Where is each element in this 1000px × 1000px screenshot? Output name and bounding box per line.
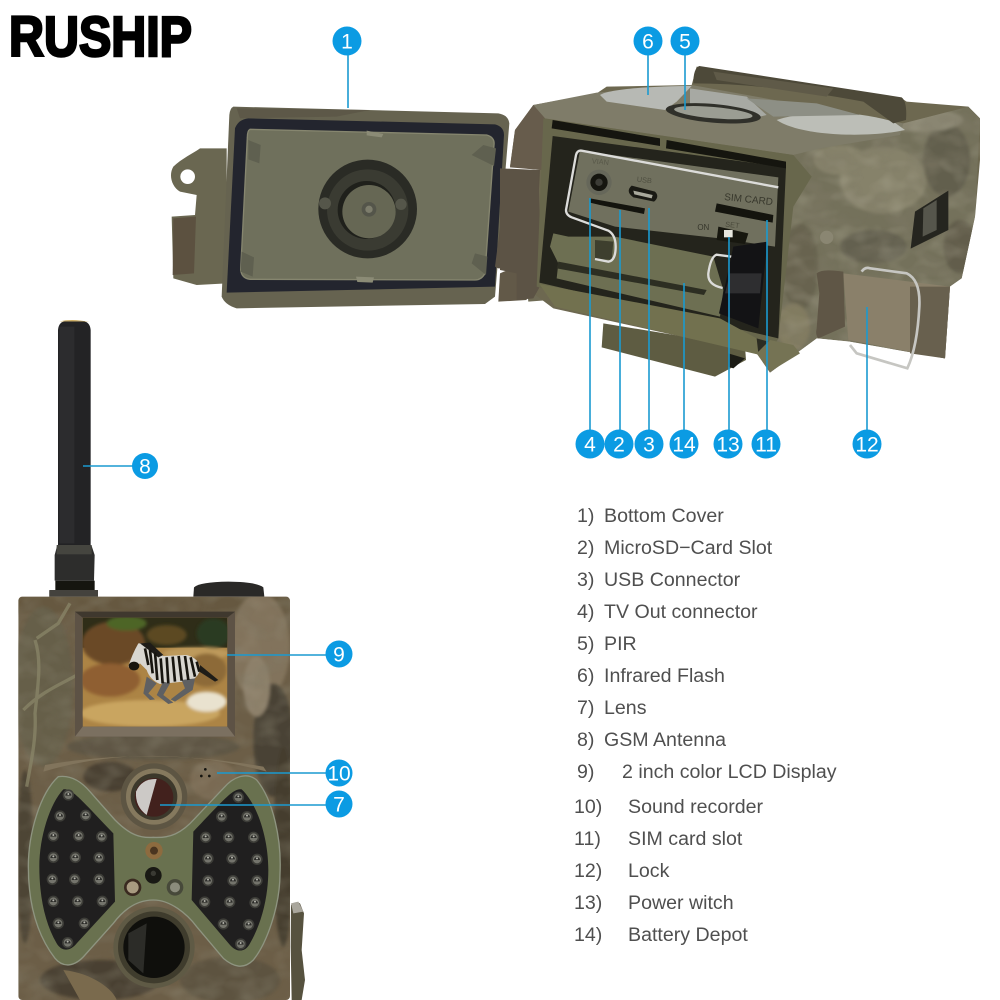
microSD slot [590,198,645,214]
badge 4 [576,430,604,458]
SIM slot [715,203,773,223]
item 1: Bottom Cover [604,505,724,527]
top face [533,85,903,155]
badge 11 [752,430,780,458]
badge 7: 7 [333,794,345,816]
item 3: USB Connector [604,569,741,591]
cover ear and latch [171,148,227,285]
badge 11: 11 [755,434,777,456]
clips [241,140,496,277]
side latch [291,902,305,1000]
lens [121,763,187,830]
port panel: VIAN [591,156,609,167]
lock strap behind [843,273,950,358]
side vent window [911,191,948,249]
item 12: 12) [574,860,602,882]
badge 12 [852,430,882,458]
item 11: 11) [574,828,601,850]
badge 8: 8 [139,456,151,478]
badge 4: 4 [584,434,596,456]
antenna [49,320,98,597]
badge 10: 10 [327,762,351,786]
badge 1 [332,26,362,56]
badge 14 [670,430,698,458]
antenna base [49,590,98,597]
PIR sensor window [113,907,195,988]
foliage on lower housing [63,970,117,1000]
body silhouette [510,67,980,373]
item 2: 2) [577,537,594,559]
gasket [227,118,504,293]
lock strap and hinge [816,268,950,368]
item 12: Lock [628,860,670,882]
item 8: GSM Antenna [604,729,726,751]
lower rim [539,284,760,355]
infrared flash windows [600,86,692,110]
dark interior [539,136,786,338]
badge 1: 1 [341,30,353,54]
title: RUSHIP brand: RUSHIP [9,5,192,69]
camo housing [13,593,293,1000]
zebra [128,643,218,704]
badge 5 [670,26,700,56]
USB port [629,186,657,202]
badge 2: 2 [613,434,625,456]
badge 13 [714,430,742,458]
round boss [318,160,417,258]
badge 7 [326,790,352,818]
item 11: SIM card slot [628,828,743,850]
badge 6: 6 [642,30,654,54]
item 2: MicroSD−Card Slot [604,537,773,559]
badge 2 [604,430,634,458]
camo side wall [757,107,980,373]
item 9: 9) [577,761,594,783]
item 10: Sound recorder [628,796,764,818]
power switch [717,227,748,244]
badge 12: 12 [855,434,879,456]
front frame [537,118,812,353]
callout lines [83,41,867,805]
hinge [495,170,540,268]
port panel: ON [697,223,710,232]
item 1: 1) [577,505,594,527]
left LED array [39,789,115,950]
badge 3 [634,430,664,458]
right LED array [192,789,268,951]
panel sensors [124,842,183,896]
item 6: 6) [577,665,594,687]
metal wire clips [566,151,778,262]
badge 6 [634,26,662,56]
panel labels: SIM CARD [724,192,773,208]
item 14: Battery Depot [628,924,748,946]
port panel: USB [636,175,652,185]
rear visor [693,66,906,123]
item 5: PIR [604,633,637,655]
badge 9: 9 [333,644,345,666]
LCD bezel [75,612,235,737]
velcro strap [719,242,767,328]
badge 5: 5 [679,30,691,54]
item 3: 3) [577,569,594,591]
TV out jack [586,170,612,195]
front left column [510,105,545,170]
badge 14: 14 [672,434,696,456]
item 10: 10) [574,796,602,818]
lower tab [602,323,746,377]
PIR knob on top [193,582,264,597]
port panel [568,151,778,247]
LCD screen with zebra photo [80,616,230,727]
item 5: 5) [577,633,594,655]
IR butterfly panel [28,776,280,966]
badge 8 [132,453,158,479]
battery tray [550,233,723,317]
item 8: 8) [577,729,594,751]
item 7: 7) [577,697,594,719]
product photo: open camera cover [171,107,550,308]
item 13: Power witch [628,892,734,914]
item 4: TV Out connector [604,601,758,623]
badge 3: 3 [643,434,655,456]
product photo: open camera body [500,66,980,377]
item 6: Infrared Flash [604,665,725,687]
badge 13: 13 [716,434,740,456]
hinge side of body [500,168,542,300]
item 13: 13) [574,892,602,914]
PIR ring [665,100,762,127]
badge 9 [326,640,352,668]
cover shell [222,107,509,308]
microphone holes [200,768,211,777]
camera front [13,582,305,1000]
port panel: SET [725,220,740,230]
inner plate [241,129,494,280]
item 7: Lens [604,697,647,719]
item 4: 4) [577,601,594,623]
item 9: 2 inch color LCD Display [622,761,837,783]
parts list [574,505,837,946]
item 14: 14) [574,924,602,946]
